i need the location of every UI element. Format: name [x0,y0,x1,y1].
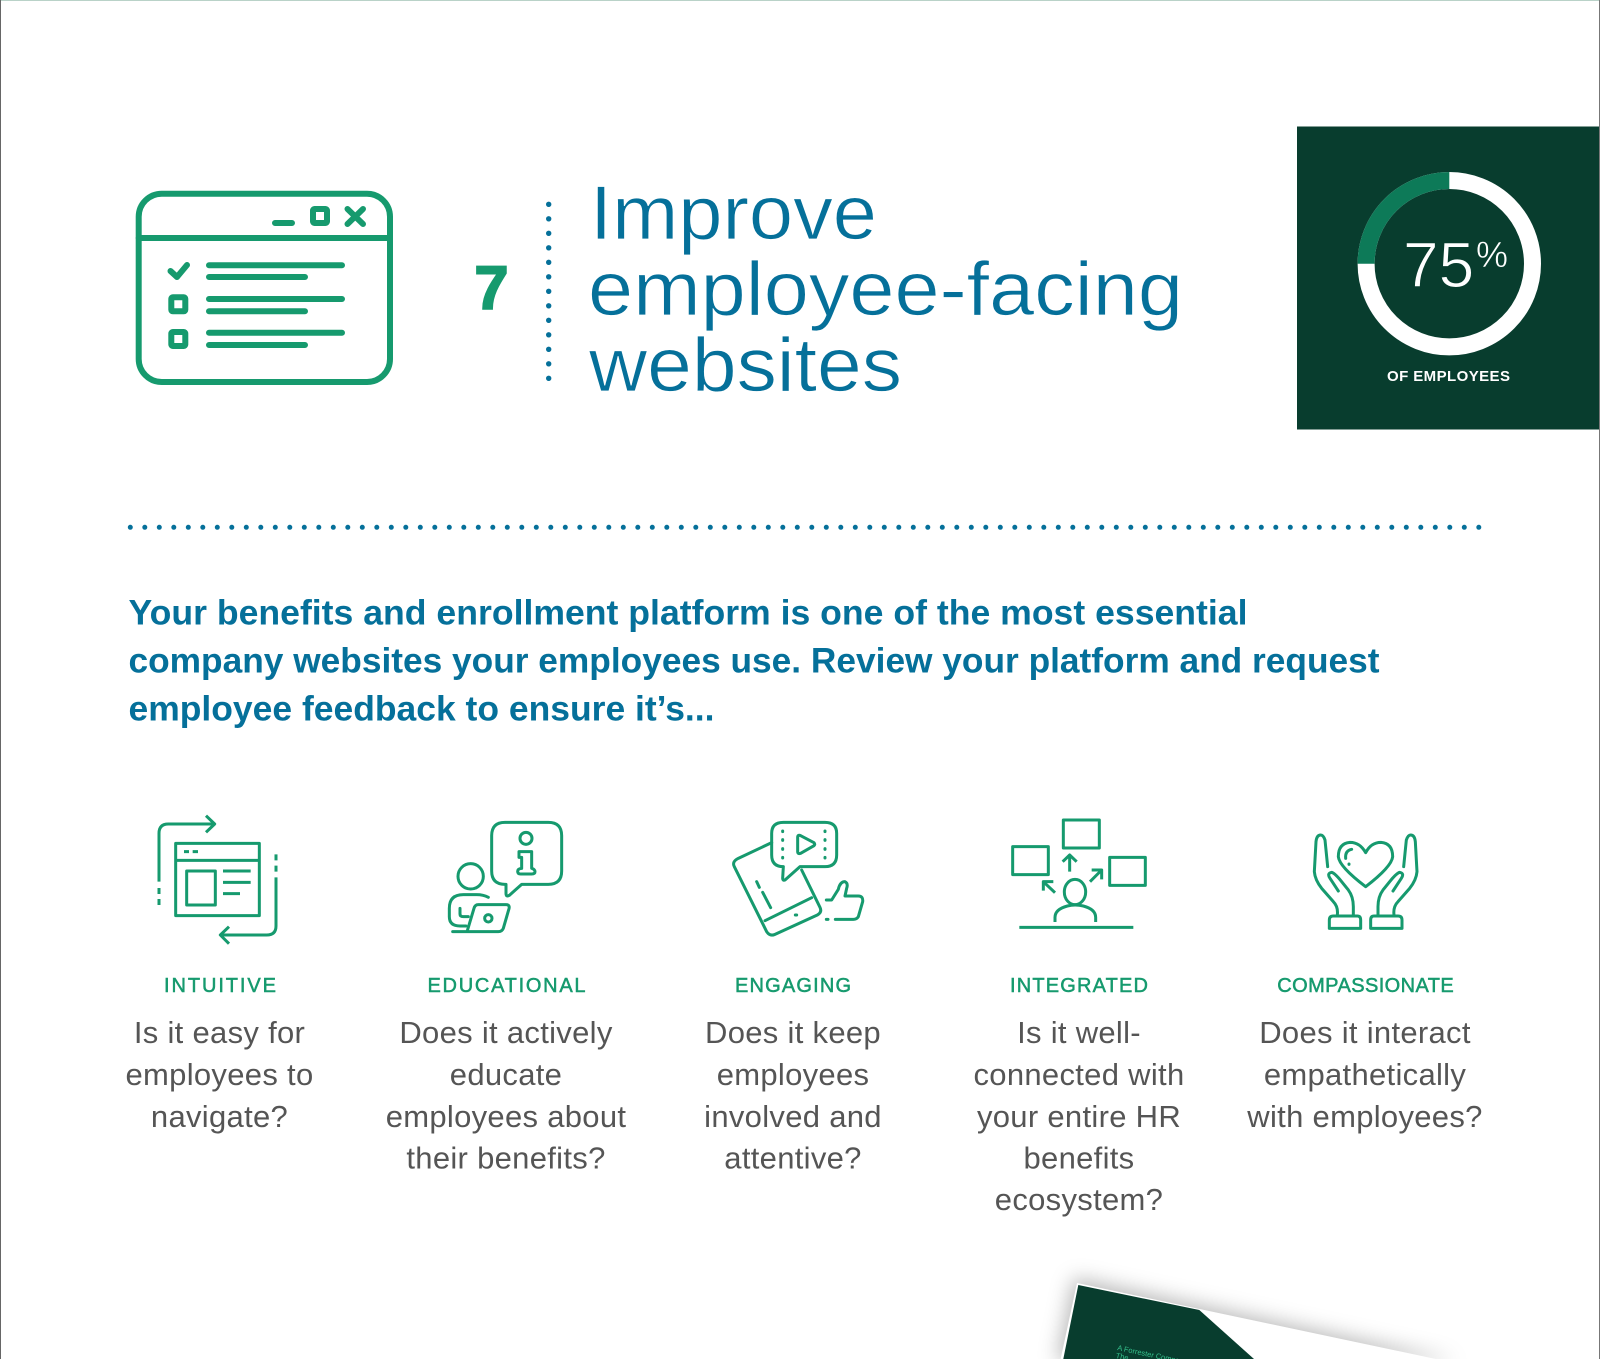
column: compassionate: empathetically [1264,1057,1466,1092]
column: integrated: Is it well- [1017,1015,1141,1050]
icon: hands holding heart [1314,835,1417,928]
icon: person with connected screens [1013,820,1145,927]
column: educational: Does it actively [399,1015,613,1050]
column: compassionate [1246,835,1483,1134]
column: integrated: ecosystem? [995,1182,1163,1217]
icon: window with arrows [159,816,276,944]
column: intuitive: navigate? [151,1099,288,1134]
column: intuitive [126,816,313,1134]
column: integrated: benefits [1024,1140,1134,1176]
column: engaging: involved and [704,1099,882,1134]
column: engaging: Does it keep [705,1015,881,1050]
section number: 7 [474,254,508,322]
title: Improve [590,171,877,256]
intro text: employee feedback to ensure it’s... [128,690,714,728]
column: engaging: employees [717,1057,869,1092]
panel: 75% of employees stat: 75 [1403,229,1474,301]
column: educational: EDUCATIONAL [428,975,586,997]
column: engaging: attentive? [724,1140,862,1176]
icon: person with laptop and info bubble [449,822,562,932]
column: compassionate: Does it interact [1259,1015,1471,1050]
column: educational: employees about [386,1099,626,1134]
column: integrated: connected with [974,1057,1184,1092]
icon: browser window checklist [139,194,390,382]
column: intuitive: INTUITIVE [164,975,276,997]
intro text: Your benefits and enrollment platform is one of the most essential [128,594,1248,632]
intro text: company websites your employees use. Review your platform and request [128,642,1380,680]
column: educational [386,822,626,1176]
column: compassionate: with employees? [1246,1099,1483,1134]
column: engaging: ENGAGING [735,975,851,997]
vertical dotted divider [546,204,551,380]
panel: 75% of employees stat [1297,126,1599,430]
report cover preview [1057,1278,1457,1359]
title: websites [588,323,902,408]
panel: 75% of employees stat: % [1476,234,1508,275]
panel: 75% of employees stat: OF EMPLOYEES [1387,368,1510,385]
horizontal dotted divider [130,525,1480,530]
donut chart [1366,180,1533,347]
column: engaging [704,822,882,1176]
icon: phone with video bubble and thumbs up [734,822,863,935]
title: employee-facing [588,247,1183,332]
column: intuitive: employees to [126,1057,313,1092]
column: integrated: INTEGRATED [1010,975,1148,997]
column: integrated: your entire HR [977,1099,1181,1134]
column: intuitive: Is it easy for [134,1015,305,1050]
column: compassionate: COMPASSIONATE [1277,975,1454,997]
title [588,171,1183,408]
column: integrated [974,820,1184,1217]
intro text [128,594,1380,728]
column: educational: their benefits? [406,1140,606,1176]
column: educational: educate [450,1057,562,1092]
